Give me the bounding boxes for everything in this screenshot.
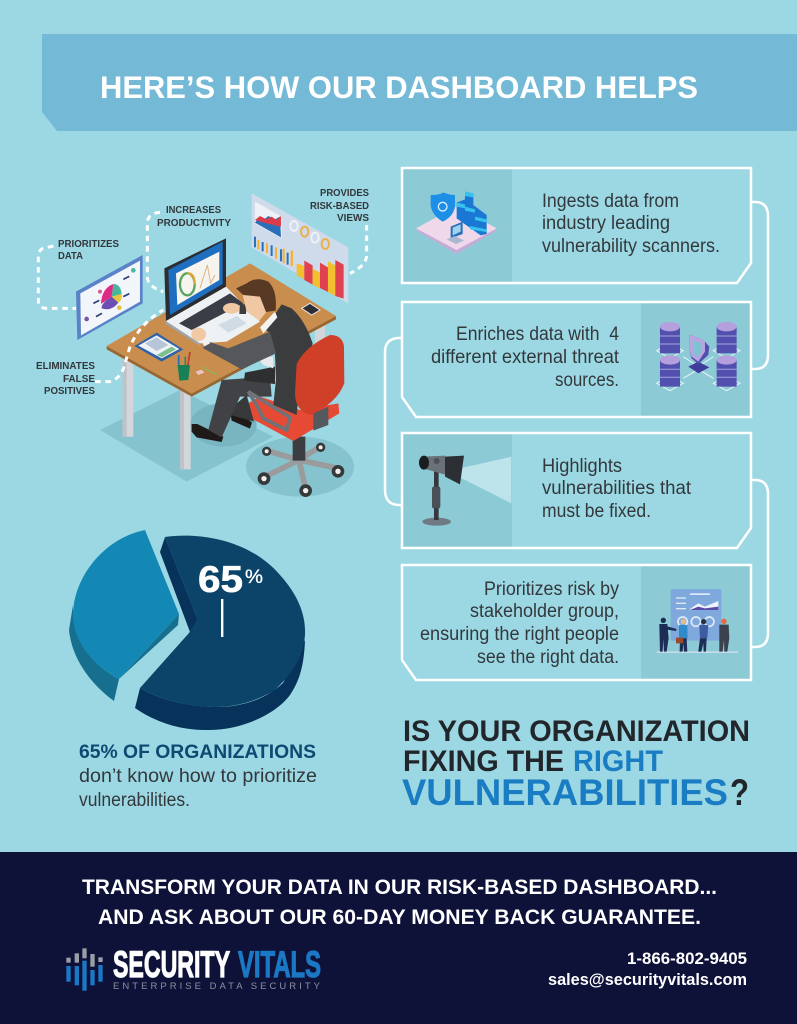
card text	[420, 579, 619, 668]
label: provides risk-based views: VIEWS	[337, 212, 369, 224]
chair	[245, 397, 344, 497]
label: increases productivity	[157, 204, 231, 229]
label: prioritizes data	[58, 238, 119, 262]
title: HERE’S HOW OUR DASHBOARD HELPS	[100, 69, 698, 105]
contact details: 1-866-802-9405	[627, 950, 747, 968]
label: prioritizes data: DATA	[58, 250, 83, 262]
question heading: IS YOUR ORGANIZATION	[403, 715, 750, 748]
logo tagline: ENTERPRISE DATA SECURITY	[113, 981, 321, 992]
label: increases productivity: PRODUCTIVITY	[157, 217, 231, 229]
footer call to action	[82, 875, 717, 929]
floor shadows	[100, 390, 354, 497]
laptop	[164, 238, 260, 346]
right dashboard screen	[252, 193, 348, 303]
man	[191, 279, 313, 442]
icon: team at data board	[657, 589, 738, 653]
connector lines between cards	[385, 202, 768, 647]
card text: sources.	[555, 370, 619, 391]
icon: servers and shield	[657, 322, 740, 391]
header banner	[42, 34, 797, 131]
label: provides risk-based views	[310, 187, 369, 224]
footer band	[0, 852, 797, 1024]
question heading: VULNERABILITIES	[402, 772, 728, 813]
label: eliminates false positives	[36, 360, 95, 397]
card 2: enriches data	[402, 302, 751, 417]
question heading: ?	[730, 772, 749, 813]
card text: vulnerability scanners.	[542, 236, 720, 257]
label: provides risk-based views: RISK-BASED	[310, 200, 369, 212]
question heading: RIGHT	[573, 745, 663, 778]
desk	[107, 263, 336, 469]
card text: Highlights	[542, 456, 622, 477]
card 3: highlights vulnerabilities	[402, 433, 751, 548]
card text: must be fixed.	[542, 501, 651, 522]
card text: Ingests data from	[542, 191, 679, 212]
footer call to action: TRANSFORM YOUR DATA IN OUR RISK-BASED DASHBOARD...	[82, 875, 717, 899]
dark slice (65%)	[135, 536, 305, 730]
label: eliminates false positives: POSITIVES	[44, 385, 95, 397]
left dashboard screen	[76, 255, 143, 340]
contact details: sales@securityvitals.com	[548, 971, 747, 989]
card text: stakeholder group,	[470, 601, 619, 622]
question heading	[402, 715, 750, 813]
card text: vulnerabilities that	[542, 478, 692, 499]
pie caption: 65% OF ORGANIZATIONS	[79, 742, 316, 763]
logo icon: signal bars	[66, 948, 103, 991]
card text: industry leading	[542, 213, 670, 234]
logo wordmark: SECURITY	[113, 944, 230, 985]
label: provides risk-based views: PROVIDES	[320, 187, 369, 199]
pie caption	[79, 742, 317, 811]
card 1: ingests data	[402, 168, 751, 283]
dashed connectors	[38, 212, 367, 382]
icon: shield and firewall platform	[416, 192, 497, 254]
3D pie chart 65%	[69, 530, 305, 730]
card text	[431, 324, 620, 391]
card text	[542, 456, 692, 522]
contact details	[548, 950, 747, 989]
icon: spotlight	[419, 456, 511, 526]
label: increases productivity: INCREASES	[166, 204, 221, 216]
card text: see the right data.	[477, 647, 619, 668]
chair back and armrest	[248, 335, 344, 430]
light slice (35%)	[69, 530, 179, 701]
card text: Prioritizes risk by	[484, 579, 619, 600]
illustration: man at desk with dashboards	[36, 187, 369, 497]
logo wordmark blue: VITALS	[238, 944, 321, 985]
pie leader line	[221, 599, 223, 637]
percent sign: %	[245, 567, 263, 588]
label: eliminates false positives: ELIMINATES	[36, 360, 95, 372]
logo	[66, 944, 321, 992]
footer call to action: AND ASK ABOUT OUR 60-DAY MONEY BACK GUARANTEE.	[98, 905, 701, 929]
pie caption: don’t know how to prioritize	[79, 766, 317, 787]
card 4: prioritizes risk	[402, 565, 751, 680]
card text: ensuring the right people	[420, 624, 619, 645]
card text	[542, 191, 720, 257]
label: eliminates false positives: FALSE	[63, 373, 95, 385]
card text: different external threat	[431, 347, 620, 368]
card text: Enriches data with 4	[456, 324, 619, 345]
pie caption: vulnerabilities.	[79, 790, 190, 811]
question heading: FIXING THE	[403, 745, 564, 778]
label: prioritizes data: PRIORITIZES	[58, 238, 119, 250]
pie value: 65	[198, 559, 243, 600]
